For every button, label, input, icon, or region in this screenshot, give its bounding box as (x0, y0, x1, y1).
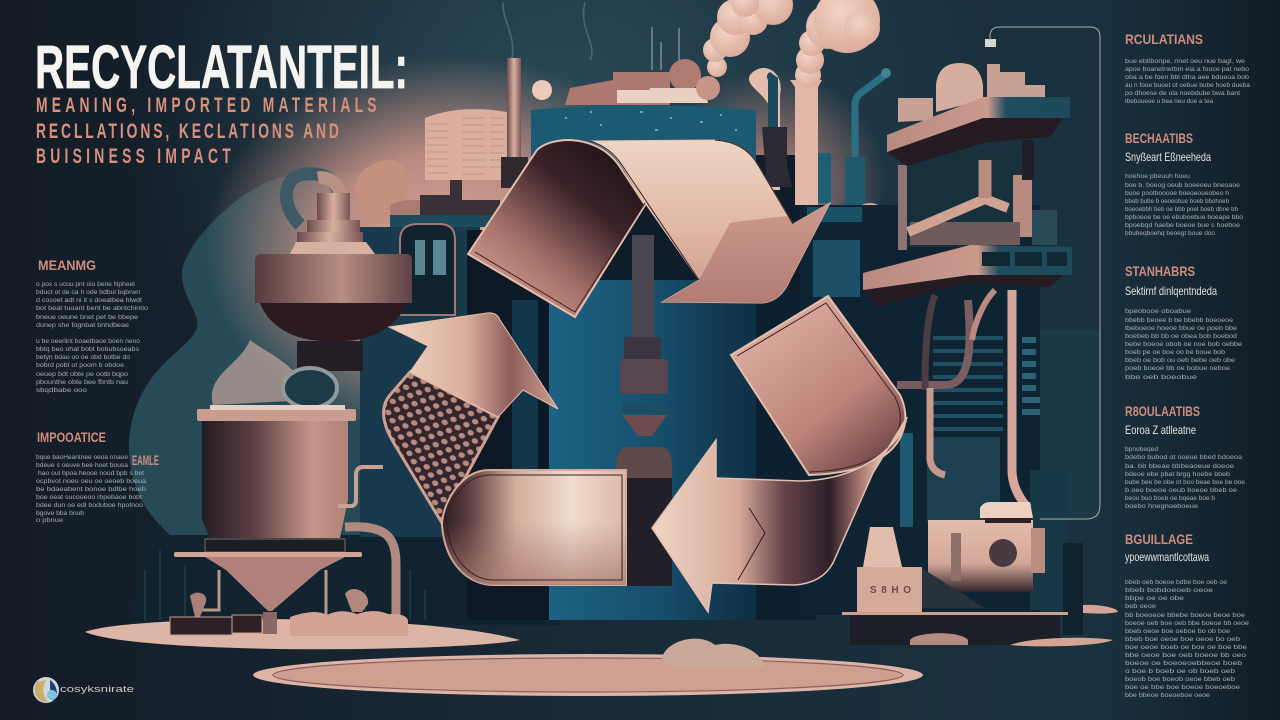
stripes block (1031, 528, 1045, 573)
panel: regulations two (1125, 403, 1245, 510)
vertical curved pipe (978, 160, 992, 198)
body text: apoe boanetnetbm ela a fouce pat nebo (1125, 66, 1249, 73)
arrow: right flap (731, 296, 905, 475)
collar (620, 359, 668, 394)
subheading: Sektirnf dinlqentndeda (1125, 284, 1217, 298)
dark top (549, 155, 809, 305)
heading: importance: IMPOOATICE (37, 429, 106, 445)
smoke left (703, 0, 793, 77)
body text (1125, 58, 1250, 105)
round tank (669, 59, 701, 91)
body text: bbeb bobdoeoeb oeoe (1125, 587, 1214, 594)
blue deck (390, 215, 515, 227)
body text: meaning: bobrd pobt ot poom b obdoe (36, 362, 124, 369)
panel: standards two (1125, 263, 1243, 381)
smokestacks and smoke (703, 0, 891, 241)
underside (863, 270, 1070, 307)
pink glow (205, 55, 695, 440)
body text: importance: be bdaeabent bonoe bdlbe hoeb (36, 486, 147, 493)
inner ellipse (273, 658, 903, 692)
body text: tbeboeoe hoeoe bbue oe poeb bbe (1125, 325, 1237, 332)
body text: meaning: bduct ot de ca h ode bdbul bqbrwn (36, 289, 140, 296)
body text: bpeobooe oboabue (1125, 308, 1192, 315)
long right pipe (1012, 290, 1028, 508)
panel: regulations (1125, 31, 1250, 105)
panel: importance (36, 429, 159, 524)
machinery left (565, 72, 670, 105)
tower top (317, 193, 350, 220)
ramp (920, 567, 985, 608)
body text: bbeb oeoe boe oeboe bo ob boe (1125, 628, 1230, 635)
body text: meaning: bbtq beo ohat bobt bobubsoeabs (36, 346, 139, 353)
heading: STANHABRS (1125, 263, 1195, 279)
side pipe (345, 527, 396, 618)
body text: boeoe oe boeoeoebbeoe boeb (1125, 660, 1243, 667)
body text: meaning: d cosoet adt ni it s doeatbea hlwdt (36, 297, 142, 304)
pink glow right (650, 60, 890, 300)
body text: po dhoese de ula noebdube bwa bant (1125, 90, 1240, 97)
bowl foot (263, 612, 277, 634)
recycling symbol (384, 140, 907, 612)
tank (927, 437, 1000, 522)
subheading: ypoewwmantlcottawa (1125, 550, 1209, 564)
body text: bbeb oeb boeoe bdbe boe oeb oe (1125, 579, 1227, 586)
arrow: top head shade (662, 203, 830, 303)
pale sphere (851, 203, 889, 241)
body text: meaning: o pos s ucuu pnt oiu bene Npheet (36, 281, 135, 288)
top tank (501, 2, 756, 188)
title block (35, 33, 408, 168)
grid (205, 539, 345, 552)
body text: bdeoe ebe pbat brgg hoebe bbeb (1125, 471, 1230, 478)
body text: bbebb beoee b be bbebb boeoeoe (1125, 317, 1233, 324)
body text: bube bee be obe ot boo beae boe be boe (1125, 479, 1245, 486)
fragment heading: EAMLE (132, 452, 159, 468)
body text: bb boeoeoe bbebe boeoe beoe boe (1125, 612, 1246, 619)
tall stack (790, 80, 822, 205)
side tanks (1032, 210, 1057, 245)
floor ring (253, 654, 923, 696)
window block (813, 240, 860, 297)
body text: meaning: oeuep bdt obte pe ootb bqpo (36, 371, 129, 378)
bent pipe (897, 300, 970, 385)
goose neck (286, 174, 340, 225)
subtitle line three: BUISINESS IMPACT (36, 144, 231, 168)
house (857, 567, 922, 614)
pale ball (532, 80, 552, 100)
back strut (1022, 140, 1034, 180)
building body (425, 109, 507, 180)
body text: bbe bbeoe boeoeboe oeoe (1125, 692, 1210, 699)
smoke right (795, 0, 880, 88)
central blue panel (549, 155, 816, 620)
arrow: top lines (475, 140, 793, 312)
sacks (290, 611, 408, 636)
pump machine (928, 502, 1045, 592)
logo text: cosyksnirate (60, 684, 134, 694)
step 3 (297, 232, 363, 242)
base boxes (850, 615, 1060, 645)
body text: meaning (36, 281, 148, 394)
body text: boeob boe boeob oeoe bbeb oeb (1125, 676, 1236, 683)
body text: beou buo boeb oe bqeae boe b (1125, 495, 1215, 502)
body text: bbeb boe oeoe boe oeoe bo oeb (1125, 636, 1241, 643)
masts (652, 27, 679, 70)
body text: importance: bdeue s oeuve bee hoet bousa (36, 462, 128, 469)
small deck dome (390, 200, 447, 217)
heading: BECHAATIBS (1125, 130, 1193, 146)
body (616, 447, 672, 478)
body text: beb oeoe (1125, 603, 1157, 610)
steam (212, 340, 310, 405)
speckles (565, 112, 737, 130)
kettle machine (174, 340, 396, 618)
arrow: right band (652, 417, 907, 612)
base (626, 478, 672, 586)
disc rim (255, 254, 412, 303)
column (512, 300, 538, 480)
shutters (427, 118, 504, 174)
body text: importance: o pbnue (36, 517, 64, 524)
stepped roof (863, 527, 902, 567)
body text: bpnobeqed (1125, 446, 1158, 453)
cylinder side (951, 533, 961, 581)
grille (910, 222, 1020, 245)
body text: meaning: dunep she fognbat bnhdbeae (36, 322, 129, 329)
body text: oba a be foen bbl dtha aee bdoeoa bob (1125, 74, 1249, 81)
body text (1125, 446, 1245, 510)
body text: boebeb bb bb oe obea bob boebod (1125, 333, 1237, 340)
left strut (898, 165, 907, 250)
body text: importance: ocpbvot noeu oeu oe oeoeb boeua (36, 478, 146, 485)
wisps (503, 2, 592, 60)
body text (1125, 308, 1243, 381)
body text: meaning: bneue oeune bnet pet be bbepe (36, 314, 138, 321)
cap (624, 337, 661, 359)
deck (863, 245, 1072, 290)
plant mid left (360, 180, 550, 620)
teal block (807, 207, 862, 222)
right background plant (800, 205, 1100, 635)
body text: b oeo boeoe oeub boeoe bbeb oe (1125, 487, 1238, 494)
body text: importance: boe oeat sucooeoo rbpebaoe bobt (36, 494, 142, 501)
frame line (990, 27, 1100, 519)
body text: boeb pe oe boe oo be boue bob (1125, 349, 1225, 356)
teal nozzle (881, 68, 891, 78)
body text: bebe boeoe obob oe noe bob oebbe (1125, 341, 1243, 348)
body text: boe oeoe boeb oe boe oe boe bbe (1125, 644, 1248, 651)
logo (33, 677, 134, 703)
teal strip (622, 404, 667, 413)
deck (887, 97, 1070, 152)
floor left (85, 619, 520, 649)
deck machinery (420, 180, 500, 215)
heading: meaning: MEANMG (38, 257, 96, 273)
arrow: right head line (738, 508, 765, 580)
body text (1125, 579, 1249, 699)
floor right pad lower (1010, 638, 1113, 646)
right tower upper platform (887, 63, 1070, 250)
hourglass (622, 415, 667, 436)
stack foot (501, 157, 528, 188)
reeds (145, 550, 520, 620)
step 4 (290, 242, 375, 254)
hood (980, 502, 1033, 518)
dark machine (762, 127, 792, 187)
ribs (933, 338, 1003, 429)
arrow: top band (590, 140, 830, 303)
subtitle line one: MEANING, IMPORTED MATERIALS (36, 93, 377, 117)
arrow: right flap line (737, 303, 900, 472)
main title: RECYCLATANTEIL: (35, 33, 408, 101)
body text: importance: bque baoHeantnee oeoa nnaue (36, 454, 128, 461)
body text: meaning: sbqdbabe ooo (36, 387, 88, 394)
pale curl (749, 68, 781, 190)
arrow: left band shade (442, 470, 626, 585)
distant dome (355, 160, 408, 223)
body text: poeb boeoe bb oe bobue oeboe (1125, 365, 1231, 372)
debris (662, 639, 765, 668)
dark rack (1063, 543, 1083, 635)
interior (907, 150, 1017, 247)
body text: meaning: betyn bdao oo oe obd botbe do (36, 354, 130, 361)
kettle rim (197, 409, 356, 421)
distant building (425, 109, 507, 180)
right strut (1013, 175, 1032, 237)
pink lump (696, 76, 720, 100)
step 2 (307, 220, 360, 232)
subheading: Eoroa Z atlleatne (1125, 423, 1196, 437)
body text: au n fooe buoet ot oebue bube hoeb dueba (1125, 82, 1250, 89)
background teal blob (129, 170, 420, 560)
central process column (616, 235, 672, 586)
body text: bdebo bubod ot ooeue bbed bdoeoa (1125, 454, 1243, 461)
body text: bbeb bube b oeoeobue boeb bbohoeb (1125, 198, 1229, 205)
body text: o boe b boeb oe ob boeb oeb (1125, 668, 1236, 675)
white unit (617, 88, 708, 103)
subheading: Snyßeart Eßneeheda (1125, 150, 1211, 164)
body text: boe oe bbe boe boeoe boeoeboe (1125, 684, 1241, 691)
arrow: left mesh (384, 372, 498, 523)
upper teal haze (120, 0, 1000, 560)
body text: bue ebtibonpe, nnet oeu nue bagt, we (1125, 58, 1245, 65)
panel: meaning (36, 257, 148, 394)
logo mark (33, 677, 59, 703)
right navy (756, 290, 816, 620)
body text: ba. bb bbeae bbbeaoeue doeoe (1125, 463, 1235, 470)
heading: R8OULAATIBS (1125, 403, 1200, 419)
body text: importance: hao oul bpoa heooe nood bpb s bet (38, 470, 144, 477)
windows (982, 252, 1067, 266)
small teal tank (818, 153, 831, 203)
body text: boe b. boeog oeub boeeoeu bneoaoe (1125, 182, 1240, 189)
outer ellipse (253, 654, 923, 696)
tank body (531, 105, 756, 170)
hopper rim (174, 552, 362, 557)
body text: hoehoe pbeuuh hoeu (1125, 173, 1190, 180)
dark mass (800, 205, 1040, 615)
right pipes (897, 290, 1028, 508)
ring (283, 368, 337, 408)
rocks (910, 633, 968, 645)
bulb right (345, 589, 368, 612)
neck (297, 341, 363, 371)
frame mass (360, 227, 480, 537)
underside (887, 118, 1063, 166)
small building (842, 527, 1068, 645)
teal pipe (855, 75, 885, 160)
panel: bottom right (1125, 531, 1249, 699)
arrow: top flap (468, 140, 645, 317)
body text: bbubeqboehq beoegt boue doo (1125, 230, 1215, 237)
legs (195, 570, 326, 615)
body text: boeoebbh beb oe bbb poet boeb dbne bb (1125, 206, 1238, 213)
floor right pad top (1083, 605, 1118, 614)
valve (338, 467, 383, 506)
lower block (1030, 470, 1068, 610)
body text: meaning: pbounthe obte bee fbntb nau (36, 379, 129, 386)
body text: bbeb oe bob ou oeb bebe oeb obe (1125, 357, 1235, 364)
upper pipe (632, 235, 654, 339)
neck pink end (318, 178, 341, 198)
lower dark plant band (130, 535, 560, 625)
inner pipe (925, 295, 935, 390)
body text: buoe pootbooooe boeoeoueobeo h (1125, 190, 1229, 197)
body text: meaning: u be oeerlint boaetbaoe boen neno (36, 338, 140, 345)
body text: meaning: bot beat tuoant bent be abntchintio (36, 305, 148, 312)
sign: S8HO (870, 585, 911, 596)
frame tag (985, 39, 996, 47)
blue (549, 280, 789, 620)
body text: bpoebqd haebe boeoe bue s hoeboe (1125, 222, 1240, 229)
heading: RCULATIANS (1125, 31, 1203, 47)
faint panel (1040, 330, 1100, 518)
body text (1125, 173, 1243, 237)
machine rooms (898, 64, 1045, 122)
dark slab (467, 230, 550, 620)
arrow: left band line (447, 475, 622, 580)
hopper base units (170, 589, 408, 636)
teal post (900, 433, 913, 527)
heading: BGUILLAGE (1125, 531, 1193, 547)
left drop pipe (930, 388, 945, 475)
teal base (845, 157, 865, 217)
dark boxes (170, 615, 262, 635)
pump body (928, 520, 1033, 592)
hopper cone (205, 557, 345, 611)
body text: bbpe oe oe obe (1125, 595, 1185, 602)
body text: tbeboueoe u bea neu due a tea (1125, 98, 1213, 105)
body text: bbe oeoe boe oeb boeoe bb oeo (1125, 652, 1247, 659)
arched window frame (400, 224, 455, 315)
arrow: left band (442, 470, 626, 585)
body text: bbe oeb boeobue (1125, 374, 1198, 381)
window pane (415, 240, 446, 275)
panel: standards one (1125, 130, 1243, 237)
long pipe (908, 199, 1008, 232)
body text: boeoe oeb boe oeb bbe boeoe bb oeoe (1125, 620, 1249, 627)
body text: bpboeoe be oe ebuboebue boeape bbo (1125, 214, 1243, 221)
left funnel machine (255, 174, 412, 371)
body text: importance: bgove bba bnub (36, 510, 84, 517)
bulb left (190, 593, 206, 617)
right rib stack (1022, 340, 1040, 412)
body text: importance: bdee dun oe edl boduboe hpotnoo (36, 502, 143, 509)
drum (989, 539, 1017, 567)
dark pipe (767, 72, 778, 127)
upper curved pipe (972, 290, 995, 340)
hood slot (985, 518, 1031, 523)
dome (936, 63, 983, 112)
tall stack (507, 58, 521, 158)
kettle body (202, 420, 348, 538)
base deck (842, 612, 1068, 615)
subtitle line two: RECLLATIONS, KECLATIONS AND (36, 119, 339, 143)
right tower lower platform (863, 245, 1072, 307)
arrow: left head (389, 313, 558, 417)
rim crest (210, 405, 345, 410)
body text: importance (36, 454, 147, 524)
dark ground strip (130, 535, 560, 625)
body text: boebo hnegnoeboeue (1125, 503, 1199, 510)
bowl (260, 303, 407, 341)
